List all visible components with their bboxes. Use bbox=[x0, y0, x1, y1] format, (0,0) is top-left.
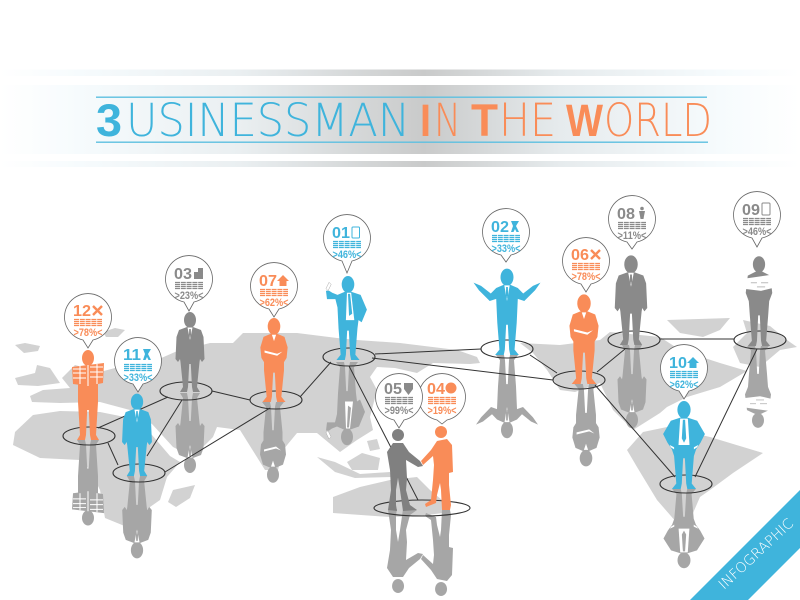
bubble 03 bbox=[166, 256, 212, 311]
central continent bbox=[520, 332, 747, 430]
title: W bbox=[566, 95, 603, 146]
title: USINESSMAN bbox=[126, 94, 410, 147]
world map bbox=[13, 318, 797, 527]
corner ribbon: INFOGRAPHIC bbox=[716, 516, 797, 593]
person 03 bbox=[176, 312, 204, 392]
person 06 bbox=[569, 294, 599, 384]
person 10 bbox=[663, 401, 705, 489]
bubble 09 bbox=[734, 192, 780, 247]
bubble 04: >19%< bbox=[428, 405, 456, 417]
bubble 05: 05 bbox=[384, 381, 402, 398]
person 09 with paper bbox=[745, 256, 773, 346]
title bbox=[96, 94, 712, 147]
bubble 06: 06 bbox=[571, 247, 589, 264]
title: I bbox=[420, 95, 431, 146]
header bands bbox=[0, 70, 800, 167]
node rings bbox=[63, 331, 786, 516]
Iceland bbox=[15, 343, 40, 353]
bubble 05: >99%< bbox=[384, 405, 414, 417]
corner ribbon bbox=[690, 490, 800, 600]
reflections bbox=[72, 345, 772, 596]
bubble 02: >33%< bbox=[492, 243, 520, 255]
bubble 07: >62%< bbox=[260, 297, 288, 309]
Eurasia bbox=[30, 333, 480, 470]
Australia bbox=[333, 477, 450, 517]
bubble 10: 10 bbox=[669, 355, 687, 372]
bubble 02 bbox=[482, 209, 530, 262]
bubble 04 bbox=[418, 374, 466, 424]
bubble 06 bbox=[562, 238, 610, 292]
title: ORLD bbox=[604, 94, 712, 147]
person 04 shaking hands bbox=[421, 426, 453, 510]
bubble 12 bbox=[64, 294, 112, 348]
Africa bbox=[13, 411, 180, 527]
bubble 07: 07 bbox=[259, 273, 277, 290]
bubble 08 bbox=[608, 196, 656, 249]
person 11 bbox=[122, 394, 152, 476]
person 02 bbox=[474, 269, 540, 355]
bubble 04: 04 bbox=[427, 381, 445, 398]
title: 3 bbox=[96, 95, 122, 146]
bubble 10: >62%< bbox=[670, 379, 698, 391]
northern island bbox=[103, 328, 125, 337]
bubble 11 bbox=[114, 338, 162, 392]
bubble 03: >23%< bbox=[174, 290, 204, 302]
bubble 01 bbox=[324, 215, 370, 273]
network lines bbox=[98, 339, 757, 500]
bubble 05 bbox=[376, 374, 422, 428]
Asian islands bbox=[317, 439, 392, 478]
person 12 with newspaper bbox=[72, 350, 104, 440]
person 01 bbox=[326, 276, 367, 360]
bubble 03: 03 bbox=[174, 266, 192, 283]
bubble 07 bbox=[250, 263, 298, 317]
northern land bbox=[667, 318, 797, 367]
person 05 shaking hands bbox=[387, 429, 423, 511]
bubble 12: 12 bbox=[73, 303, 91, 320]
bubble 01: >46%< bbox=[332, 249, 362, 261]
British Isles bbox=[15, 365, 60, 386]
bubble 09: 09 bbox=[742, 202, 760, 219]
bubble 12: >78%< bbox=[74, 327, 102, 339]
Madagascar bbox=[168, 485, 195, 507]
bubble 11: >33%< bbox=[124, 372, 152, 384]
South America bbox=[627, 427, 763, 523]
bubble 06: >78%< bbox=[572, 271, 600, 283]
title: HE bbox=[499, 94, 556, 147]
title: N bbox=[434, 94, 461, 147]
bubble 08: 08 bbox=[617, 206, 635, 223]
bubble 11: 11 bbox=[123, 347, 141, 364]
bubble 09: >46%< bbox=[742, 226, 772, 238]
person 08 bbox=[615, 255, 647, 345]
bubble 08: >11%< bbox=[618, 230, 646, 242]
title: T bbox=[471, 95, 498, 146]
bubble 10 bbox=[660, 345, 708, 399]
person 07 bbox=[260, 318, 288, 402]
bubble 02: 02 bbox=[491, 219, 509, 236]
bubble 01: 01 bbox=[332, 225, 350, 242]
